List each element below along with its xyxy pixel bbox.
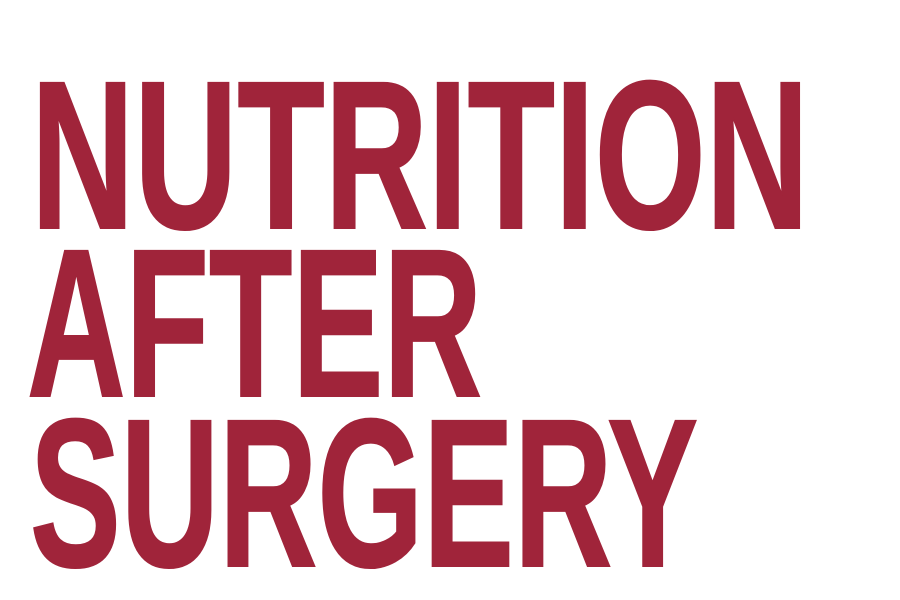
title line: AFTER: AFTER (27, 205, 482, 441)
